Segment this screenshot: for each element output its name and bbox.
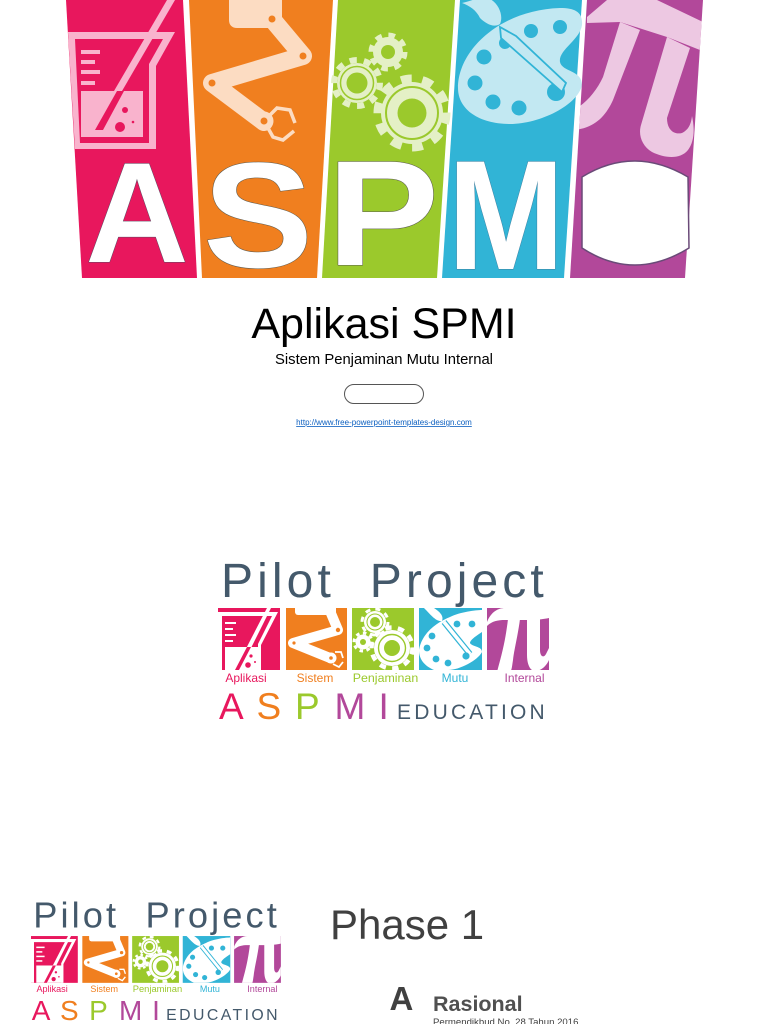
wordmark ASPMI bbox=[219, 686, 389, 727]
panel: blue palette banner bbox=[442, 0, 582, 303]
section letter A: A bbox=[390, 980, 413, 1017]
section title: Rasional: Rasional bbox=[433, 992, 523, 1016]
heading: Pilot Project: Pilot Project bbox=[33, 895, 280, 936]
panel: orange robot arm banner bbox=[189, 0, 333, 299]
subtitle: Sistem Penjaminan Mutu Internal bbox=[275, 352, 493, 368]
tile labels: Sistem bbox=[297, 671, 333, 685]
wordmark ASPMI: I bbox=[378, 686, 389, 727]
icon tiles bbox=[31, 933, 281, 984]
banner letter A: A bbox=[85, 134, 189, 293]
tile labels: Mutu bbox=[200, 984, 220, 994]
tile labels: Aplikasi bbox=[225, 671, 267, 685]
icon: gears bbox=[334, 35, 446, 148]
wordmark EDUCATION: EDUCATION bbox=[166, 1007, 280, 1024]
tile labels: Penjaminan bbox=[133, 984, 182, 994]
tile labels: Aplikasi bbox=[37, 984, 68, 994]
heading: Phase 1: Phase 1 bbox=[330, 901, 484, 948]
icon: paint palette bbox=[458, 0, 582, 124]
banner letter M: M bbox=[448, 129, 564, 303]
panel: purple pi banner bbox=[570, 0, 703, 278]
small logo: Pilot Project ASPMI Education bbox=[31, 895, 281, 1024]
wordmark ASPMI bbox=[32, 995, 160, 1024]
wordmark ASPMI: M bbox=[334, 686, 365, 727]
panel: green gears banner bbox=[322, 0, 455, 297]
wordmark ASPMI: P bbox=[295, 686, 320, 727]
tile labels: Penjaminan bbox=[353, 671, 418, 685]
tile labels: Sistem bbox=[90, 984, 118, 994]
icon: pi symbol bbox=[570, 0, 703, 157]
panel: pink beaker banner bbox=[66, 0, 197, 293]
tile labels: Internal bbox=[247, 984, 277, 994]
logo: Pilot Project ASPMI Education bbox=[218, 555, 549, 727]
wordmark ASPMI: A bbox=[219, 686, 244, 727]
icon: robot arm bbox=[208, 0, 306, 140]
empty pill button bbox=[344, 384, 424, 404]
icon tiles bbox=[218, 604, 549, 672]
tile labels bbox=[225, 671, 545, 685]
banner white lozenge glyph bbox=[582, 161, 689, 265]
banner letter P: P bbox=[327, 129, 439, 297]
heading: Pilot Project: Pilot Project bbox=[221, 555, 548, 608]
title: Aplikasi SPMI bbox=[251, 300, 517, 348]
wordmark ASPMI: S bbox=[256, 686, 281, 727]
tile labels: Mutu bbox=[442, 671, 468, 685]
tile labels bbox=[37, 984, 277, 994]
wordmark EDUCATION: EDUCATION bbox=[397, 701, 548, 724]
icon: beaker bbox=[68, 0, 175, 149]
tile labels: Internal bbox=[504, 671, 545, 685]
banner letter S: S bbox=[203, 132, 313, 299]
link text: http://www.free-powerpoint-templates-design.com bbox=[296, 418, 472, 427]
